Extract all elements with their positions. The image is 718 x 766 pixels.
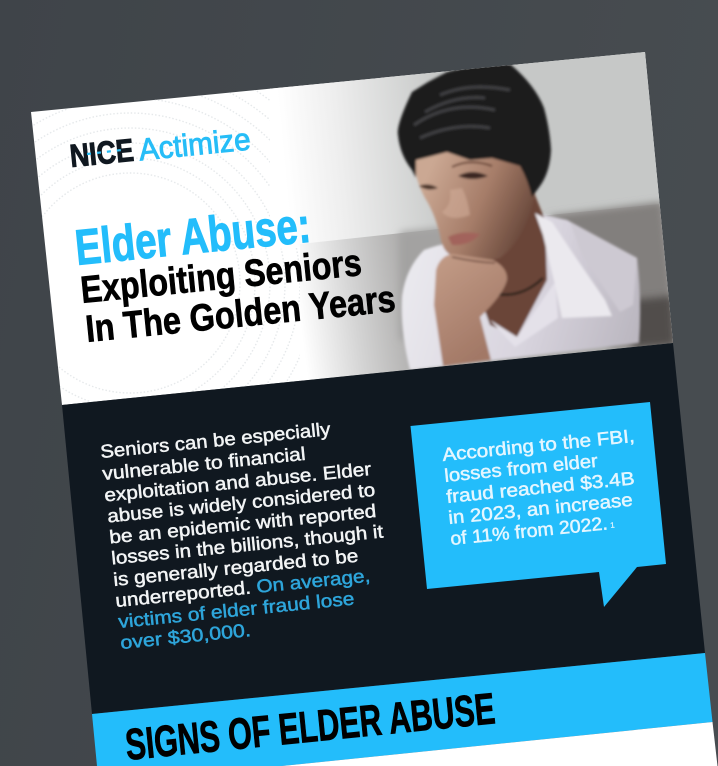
intro paragraph: is generally regarded to be — [112, 545, 359, 590]
callout: FBI statistic speech bubble: in 2023, an increase — [447, 489, 633, 528]
neck — [484, 194, 548, 338]
intro paragraph: abuse is widely considered to — [106, 479, 376, 526]
panel: dark intro section — [62, 343, 705, 714]
title: In The Golden Years — [84, 278, 397, 351]
intro paragraph: Seniors can be especially — [99, 418, 332, 462]
panel: header with logo, title and photo — [31, 52, 673, 405]
hand — [434, 254, 507, 366]
callout: FBI statistic speech bubble: losses from elder — [443, 450, 599, 486]
intro paragraph: exploitation and abuse. Elder — [103, 458, 372, 505]
callout: FBI statistic speech bubble: fraud reached $3.4B — [445, 467, 635, 507]
eyes and brows — [458, 172, 488, 179]
title — [73, 197, 397, 351]
callout: FBI statistic speech bubble — [410, 402, 666, 607]
callout: FBI statistic speech bubble: 1 — [610, 521, 616, 530]
title: Exploiting Seniors — [79, 242, 363, 312]
intro paragraph: be an epidemic with reported — [108, 500, 377, 547]
collar — [535, 213, 612, 318]
shirt — [402, 213, 640, 370]
face — [414, 140, 535, 261]
intro paragraph — [99, 418, 384, 653]
mouth — [448, 233, 480, 245]
logo: Actimize — [137, 122, 252, 167]
hair — [398, 64, 551, 197]
photo: senior woman resting chin on hand — [270, 50, 677, 388]
intro paragraph: vulnerable to financial — [101, 443, 306, 484]
nose — [442, 188, 470, 218]
intro paragraph: losses in the billions, though it — [110, 520, 384, 568]
intro paragraph: over $30,000. — [119, 619, 252, 653]
intro paragraph: victims of elder fraud lose — [117, 588, 355, 632]
logo — [68, 122, 252, 174]
callout: FBI statistic speech bubble: of 11% from 2022. — [449, 512, 609, 549]
intro paragraph: underreported. On average, — [114, 565, 371, 611]
panel: signs of elder abuse heading band — [92, 653, 718, 766]
title: Elder Abuse: — [73, 197, 313, 276]
callout: FBI statistic speech bubble: According to the FBI, — [441, 425, 635, 465]
concentric dotted pattern — [34, 90, 300, 405]
logo: NICE — [68, 132, 135, 174]
